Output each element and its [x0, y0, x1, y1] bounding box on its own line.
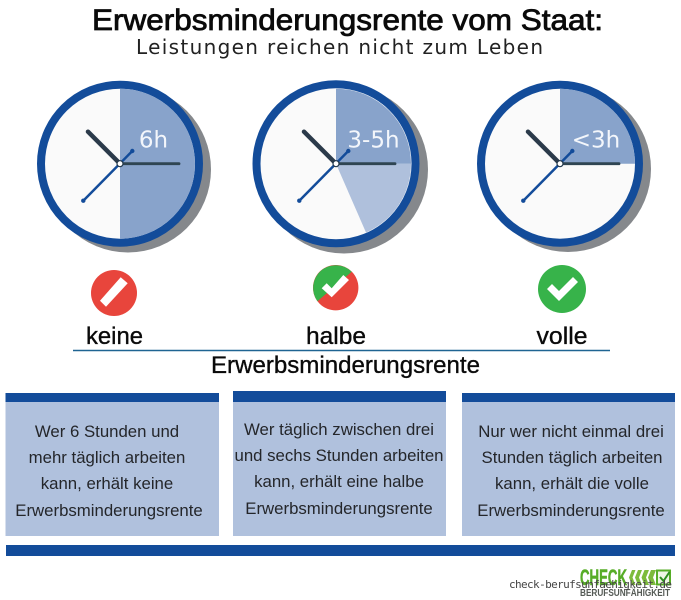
panel: halbe: Erwerbsminderungsrente [245, 499, 433, 518]
clock: under 3h: <3h [572, 128, 620, 154]
logo: CHECK [580, 565, 627, 590]
panel: halbe: kann, erhält eine halbe [254, 472, 424, 491]
panel: halbe: und sechs Stunden arbeiten [234, 446, 444, 465]
clock: 3-5h: 3-5h [347, 128, 400, 154]
panel: halbe: Wer täglich zwischen drei [244, 420, 434, 439]
panel: volle: Stunden täglich arbeiten [482, 448, 662, 467]
icon: green check [538, 265, 586, 313]
panel: volle: Nur wer nicht einmal drei [478, 422, 664, 441]
panel: halbe [233, 391, 446, 536]
icon: half green half red check [313, 265, 358, 310]
clock: 6h [41, 85, 211, 252]
panel: volle: kann, erhält die volle [495, 474, 649, 493]
website url: check-berufsunfaehigkeit.de [509, 578, 672, 591]
panel: keine: kann, erhält keine [41, 474, 173, 493]
title: Erwerbsminderungsrente vom Staat: [92, 4, 603, 37]
label: halbe: halbe [306, 323, 366, 350]
panel: keine [6, 393, 219, 536]
icon: red prohibition [91, 270, 137, 316]
footer bar [6, 545, 675, 556]
label: Erwerbsminderungsrente: Erwerbsminderungsrente [211, 352, 480, 379]
label: volle: volle [536, 323, 588, 350]
clock: under 3h [481, 85, 651, 252]
panel: volle [462, 393, 675, 536]
clock: 3-5h [256, 84, 428, 254]
panel: volle: Erwerbsminderungsrente [477, 501, 665, 520]
subtitle: Leistungen reichen nicht zum Leben [136, 35, 543, 59]
panel: keine: Wer 6 Stunden und [35, 422, 179, 441]
clock: 6h: 6h [139, 128, 168, 154]
logo [580, 565, 670, 599]
panel: keine: Erwerbsminderungsrente [15, 501, 203, 520]
panel: keine: mehr täglich arbeiten [29, 448, 185, 467]
label: keine: keine [86, 323, 143, 350]
